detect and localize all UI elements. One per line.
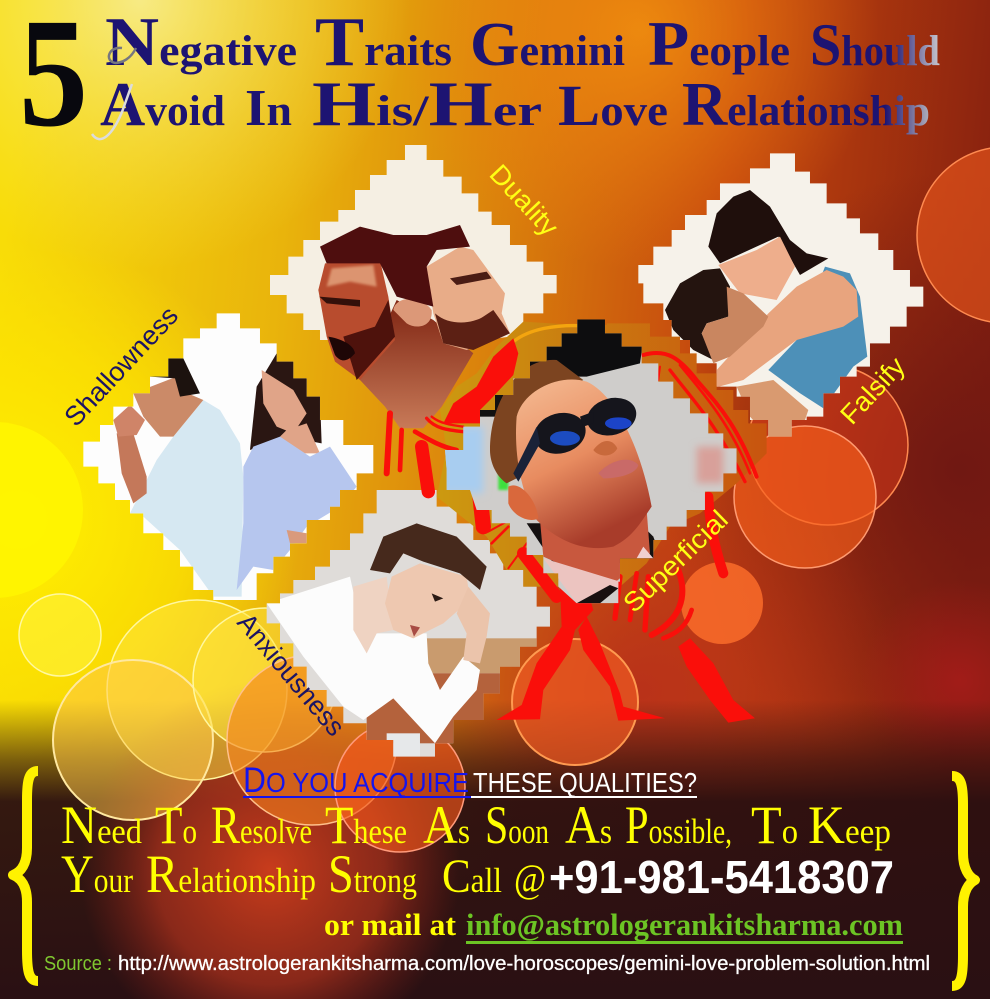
phone number: +91-981-5418307	[549, 851, 894, 903]
hand	[457, 587, 490, 663]
title: H is/H er	[312, 68, 542, 139]
ear	[508, 485, 538, 520]
title: People	[648, 8, 790, 79]
call to action text: Possible,	[625, 795, 732, 855]
photo	[440, 317, 743, 607]
source line: http://www.astrologerankitsharma.com/love-horoscopes/gemini-love-problem-solution.html	[118, 953, 930, 975]
woman face	[718, 237, 795, 300]
red stripes	[387, 353, 757, 638]
title: Love	[558, 73, 668, 138]
call to action text: @	[514, 856, 546, 901]
neck	[540, 514, 650, 581]
call to action text: To	[751, 795, 798, 855]
question heading: DO YOU ACQUIRE	[243, 761, 469, 800]
right face	[427, 247, 510, 350]
source line: Source :	[44, 953, 112, 975]
hair	[370, 523, 487, 590]
sunglasses	[536, 412, 586, 454]
woman shirt	[237, 437, 357, 590]
face	[516, 380, 652, 548]
label: Falsify: Falsify	[834, 351, 911, 430]
woman hair	[250, 353, 322, 450]
title: In	[245, 80, 292, 137]
label: Duality: Duality	[484, 159, 565, 242]
call to action text: Strong	[328, 844, 417, 904]
title: Should	[810, 12, 940, 78]
woman hair	[708, 190, 828, 275]
label: Shallowness: Shallowness	[58, 300, 184, 432]
call to action text: Need	[61, 795, 142, 855]
call to action text: Keep	[808, 795, 891, 855]
ochre stair backing	[437, 322, 767, 603]
call to action text: Your	[61, 844, 133, 904]
bokeh circles	[0, 147, 990, 852]
question heading: THESE QUALITIES?	[473, 767, 697, 798]
man hair	[665, 268, 730, 360]
hips	[737, 380, 808, 437]
call to action text: Soon	[485, 795, 549, 855]
shirt	[267, 577, 480, 743]
hair	[320, 225, 470, 307]
woman face	[262, 370, 307, 433]
title: Relationship	[682, 71, 930, 139]
panel: Shallowness photo	[58, 300, 373, 600]
lips	[598, 460, 638, 478]
call to action text: Call	[442, 850, 502, 903]
desk	[423, 638, 537, 673]
hair	[490, 360, 583, 483]
email line: info@astrologerankitsharma.com	[466, 907, 903, 942]
panel: Duality photo	[270, 145, 565, 428]
gold arc	[513, 326, 580, 342]
panel: Falsify photo	[638, 153, 923, 437]
call to action text: Resolve	[211, 795, 312, 855]
arm and shoulder	[717, 270, 858, 387]
left face	[318, 260, 395, 380]
ear	[393, 299, 432, 327]
label: Superficial: Superficial	[617, 504, 734, 618]
nose shadow	[593, 441, 617, 455]
red arm mass left	[443, 338, 518, 423]
email line: or mail at	[324, 907, 457, 942]
title: Traits	[315, 4, 452, 81]
panel: Anxiousness photo	[231, 490, 550, 757]
man face	[702, 287, 768, 363]
call to action text: As	[423, 795, 470, 855]
neck	[360, 300, 473, 428]
label: Anxiousness: Anxiousness	[231, 608, 351, 742]
man arm	[117, 433, 147, 503]
title	[92, 4, 940, 139]
legs	[560, 587, 593, 630]
call to action text: These	[325, 795, 407, 855]
tank top	[768, 267, 867, 408]
cream stair background	[270, 145, 557, 360]
call to action text: To	[155, 795, 197, 855]
left brace	[13, 771, 38, 981]
collar	[543, 558, 620, 603]
neck	[353, 577, 393, 653]
icon: red gemini twins figure and superficial photo	[387, 317, 767, 723]
man shirt	[130, 400, 243, 597]
title: Avoid	[100, 71, 225, 139]
question heading	[243, 761, 697, 800]
call to action text	[61, 795, 891, 904]
title: Gemini	[470, 11, 625, 79]
title: Negative	[105, 4, 297, 81]
man head	[133, 377, 203, 437]
right brace	[952, 776, 975, 986]
face	[385, 563, 470, 638]
call to action text: As	[565, 795, 612, 855]
call to action text: Relationship	[146, 844, 316, 904]
